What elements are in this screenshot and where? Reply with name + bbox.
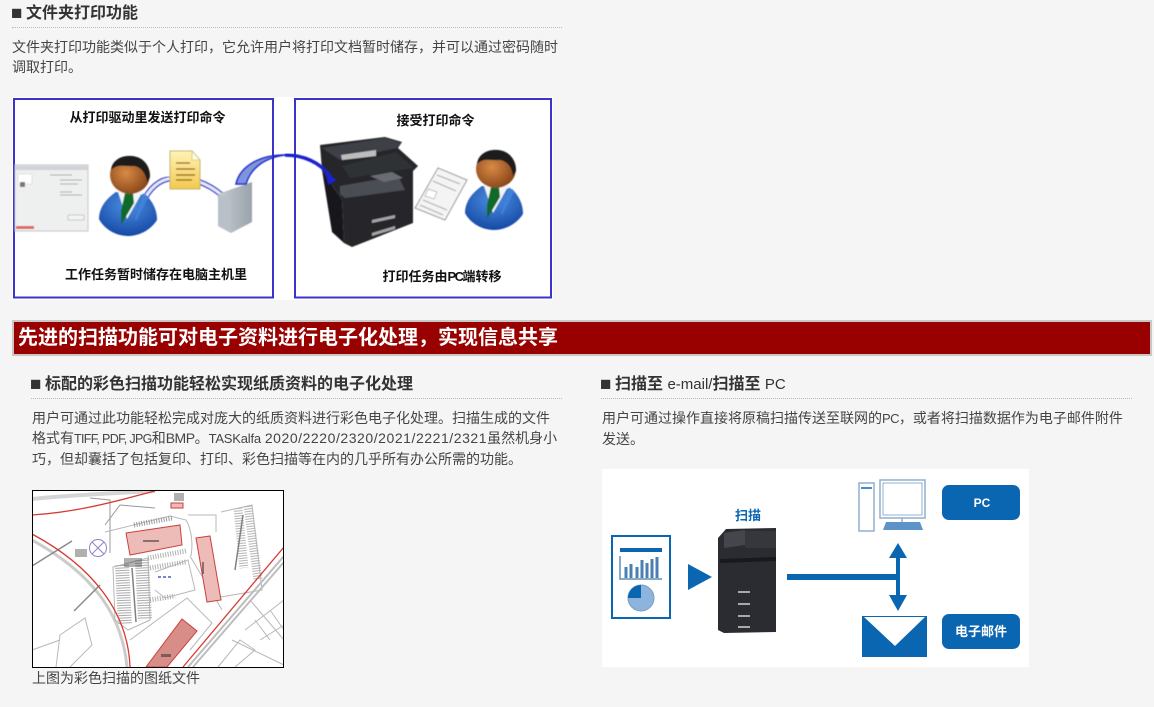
button: PC: PC [974,496,991,510]
panel: send print command [14,99,273,298]
label: scan: 扫描 [735,508,761,523]
icon: paper [415,168,467,220]
label: receive command: 接受打印命令 [396,113,475,128]
text: scan to email description: 用户可通过操作直接将原稿扫描传送至联网的PC，或者将扫描数据作为电子邮件附件 [602,410,1123,426]
parking hatch [122,506,258,625]
label: send command: 从打印驱动里发送打印命令 [69,110,226,125]
arrow: into scanner [688,564,712,590]
button: email: 电子邮件 [955,624,1007,639]
banner: scanning headline: 先进的扫描功能可对电子资料进行电子化处理，实现信息共享 [18,327,558,349]
diagram: scan destinations [602,469,1029,667]
text: folder printing description [12,39,558,75]
banner: scanning headline [12,320,1152,356]
label: job transferred: 打印任务由PC端转移 [382,269,502,284]
icon: printer [320,137,418,247]
drawing labels [75,493,204,657]
text: folder printing description: 文件夹打印功能类似于个人打印，它允许用户将打印文档暂时储存，并可以通过密码随时 [12,39,558,55]
icon: document [170,151,200,189]
icon: computer host [218,182,252,233]
image: scanned colour drawing [32,490,284,668]
icon: user [99,156,157,236]
line and double arrow [787,543,907,611]
diagram: folder printing workflow [12,97,553,300]
icon: report document [612,536,670,618]
heading: scan to email and PC: 扫描至 e-mail/扫描至 PC [615,376,786,393]
button: PC [942,485,1020,520]
heading: colour scanning: 标配的彩色扫描功能轻松实现纸质资料的电子化处理 [45,376,413,393]
arrow: computer to printer [236,155,337,185]
icon: user [465,150,523,230]
text: colour scanning description: 格式有TIFF, PDF, JPG和BMP。TASKalfa 2020/2220/2320/2021/2221/2321虽然机身小 [32,430,557,446]
icon: PC [859,480,925,531]
caption: scanned drawing: 上图为彩色扫描的图纸文件 [32,670,200,686]
button: email [942,614,1020,649]
text: folder printing description: 调取打印。 [12,59,82,75]
text: colour scanning description: 巧，但却囊括了包括复印、打印、彩色扫描等在内的几乎所有办公所需的功能。 [32,451,522,467]
icon: scanner [718,528,776,633]
panel: receive print command [295,99,551,298]
arrow: user to server [145,178,235,207]
red boundary lines [32,491,284,667]
heading: colour scanning: ■ [30,374,41,395]
red buildings [126,503,221,667]
text: colour scanning description: 用户可通过此功能轻松完成对庞大的纸质资料进行彩色电子化处理。扫描生成的文件 [32,410,550,426]
heading: folder printing: 文件夹打印功能 [26,5,138,22]
icon: envelope [862,616,927,657]
icon: print dialog [15,165,88,231]
image background [12,97,553,300]
roads and outlines [32,491,284,667]
label: job stored: 工作任务暂时储存在电脑主机里 [65,267,247,282]
heading: folder printing: ■ [11,3,22,24]
text: colour scanning description [32,410,557,467]
heading: scan to email and PC: ■ [600,374,611,395]
text: scan to email description [602,410,1123,447]
text: scan to email description: 发送。 [602,431,644,447]
